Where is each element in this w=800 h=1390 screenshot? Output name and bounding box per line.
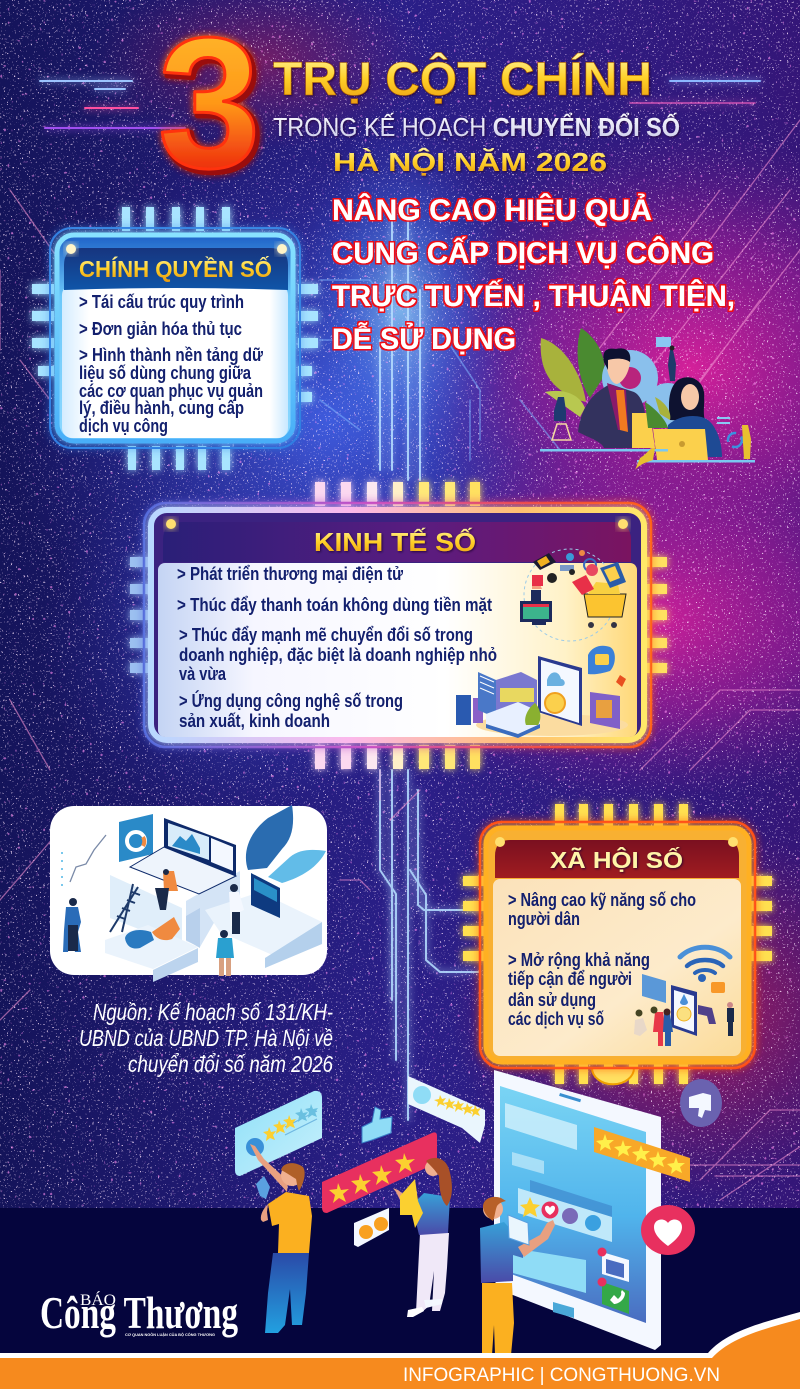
panel: xã hội số chip bbox=[463, 804, 772, 1084]
source note bbox=[79, 999, 333, 1077]
text block: xã hội số items: > Nâng cao kỹ năng số cho bbox=[508, 890, 696, 910]
text block: chính quyền số items: lý, điều hành, cung cấp bbox=[79, 398, 244, 418]
illustration: office workers with laptops bbox=[540, 328, 755, 470]
bottom dark band bbox=[0, 1208, 800, 1356]
headline: red outlined statement bbox=[332, 193, 735, 356]
text block: chính quyền số items: > Tái cấu trúc quy trình bbox=[79, 292, 244, 312]
text block: chính quyền số items: > Hình thành nền tảng dữ bbox=[79, 345, 264, 365]
text block: chính quyền số items: dịch vụ công bbox=[79, 416, 168, 436]
logo: Báo Công Thương: Công Thương bbox=[40, 1287, 238, 1338]
panel: chính quyền số chip bbox=[32, 207, 318, 470]
header: kinh tế số bbox=[163, 522, 631, 562]
text block: xã hội số items: người dân bbox=[508, 909, 580, 929]
person: woman with long hair bbox=[393, 1158, 452, 1317]
illustration: e-commerce cart bbox=[520, 549, 626, 641]
headline: red outlined statement: TRỰC TUYẾN , THUẬN TIỆN, bbox=[332, 279, 735, 313]
text block: kinh tế số items: > Phát triển thương mại điện tử bbox=[177, 564, 404, 584]
thumbs up icon bbox=[362, 1107, 392, 1143]
review card white bbox=[408, 1076, 485, 1143]
text block: kinh tế số items: và vừa bbox=[179, 664, 227, 684]
logo: Báo Công Thương: CƠ QUAN NGÔN LUẬN CỦA BỘ CÔNG THƯƠNG bbox=[125, 1332, 215, 1337]
text block: xã hội số items: các dịch vụ số bbox=[508, 1009, 604, 1029]
header: chính quyền số bbox=[64, 248, 288, 290]
text block: xã hội số items: > Mở rộng khả năng bbox=[508, 950, 650, 970]
circuit lines bbox=[0, 120, 800, 1200]
header: kinh tế số: KINH TẾ SỐ bbox=[314, 527, 476, 557]
text block: kinh tế số items: > Thúc đẩy thanh toán không dùng tiền mặt bbox=[177, 595, 492, 615]
emoji card bbox=[354, 1208, 389, 1247]
headline: red outlined statement: NÂNG CAO HIỆU QUẢ bbox=[332, 193, 652, 227]
title: main heading: TRỤ CỘT CHÍNH bbox=[273, 52, 652, 105]
phone bbox=[494, 1070, 661, 1350]
title: number 3: 3 bbox=[158, 0, 260, 207]
text block: xã hội số items: tiếp cận để người bbox=[508, 969, 632, 989]
icon: wifi and digital users bbox=[634, 947, 734, 1046]
text block: chính quyền số items bbox=[79, 292, 264, 436]
text block: chính quyền số items: liệu số dùng chung giữa bbox=[79, 363, 252, 383]
icon: thumbs down bbox=[680, 1079, 722, 1127]
text block: chính quyền số items: > Đơn giản hóa thủ tục bbox=[79, 319, 242, 339]
logo: Báo Công Thương: BÁO bbox=[80, 1290, 116, 1309]
text block: kinh tế số items bbox=[177, 564, 497, 731]
text block: chính quyền số items: các cơ quan phục vụ quản bbox=[79, 381, 263, 401]
subtitle: HÀ NỘI NĂM 2026 bbox=[333, 147, 607, 177]
title: number 3: 3 bbox=[161, 2, 263, 210]
review card blue bbox=[235, 1091, 322, 1176]
footer band bbox=[0, 1312, 800, 1390]
yellow star card bbox=[594, 1127, 690, 1182]
panel: kinh tế số chip bbox=[130, 482, 667, 769]
text block: kinh tế số items: sản xuất, kinh doanh bbox=[179, 711, 330, 731]
header: xã hội số: XÃ HỘI SỐ bbox=[550, 846, 683, 873]
subtitle: TRONG KẾ HOẠCH CHUYỂN ĐỔI SỐ bbox=[273, 112, 680, 142]
source note: Nguồn: Kế hoạch số 131/KH- bbox=[93, 999, 333, 1025]
illustration: rating phone and people bbox=[235, 1070, 722, 1355]
text block: kinh tế số items: > Ứng dụng công nghệ số trong bbox=[179, 690, 403, 711]
illustration: smart city and tablet bbox=[456, 646, 628, 738]
rating emojis bbox=[520, 1197, 601, 1231]
footer band: INFOGRAPHIC | CONGTHUONG.VN bbox=[403, 1365, 720, 1386]
header: chính quyền số: CHÍNH QUYỀN SỐ bbox=[79, 255, 272, 282]
header: xã hội số bbox=[495, 840, 739, 878]
headline: red outlined statement: CUNG CẤP DỊCH VỤ CÔNG bbox=[332, 236, 714, 270]
source note: UBND của UBND TP. Hà Nội về bbox=[79, 1025, 333, 1051]
illustration card: team working on laptop bbox=[50, 805, 327, 982]
headline: red outlined statement: DỄ SỬ DỤNG bbox=[332, 322, 516, 356]
person: man in yellow shirt bbox=[250, 1144, 312, 1333]
source note: chuyển đổi số năm 2026 bbox=[128, 1051, 333, 1077]
person: man in blue shirt bbox=[480, 1197, 555, 1355]
horizontal light streaks bbox=[40, 81, 760, 128]
red rating card bbox=[322, 1132, 437, 1213]
text block: xã hội số items bbox=[508, 890, 696, 1029]
text block: kinh tế số items: doanh nghiệp, đặc biệt là doanh nghiệp nhỏ bbox=[179, 645, 497, 665]
icon: heart bubble bbox=[641, 1205, 695, 1255]
text block: xã hội số items: dân sử dụng bbox=[508, 990, 596, 1010]
subtitle bbox=[273, 112, 680, 177]
text block: kinh tế số items: > Thúc đẩy mạnh mẽ chuyển đổi số trong bbox=[179, 625, 473, 645]
